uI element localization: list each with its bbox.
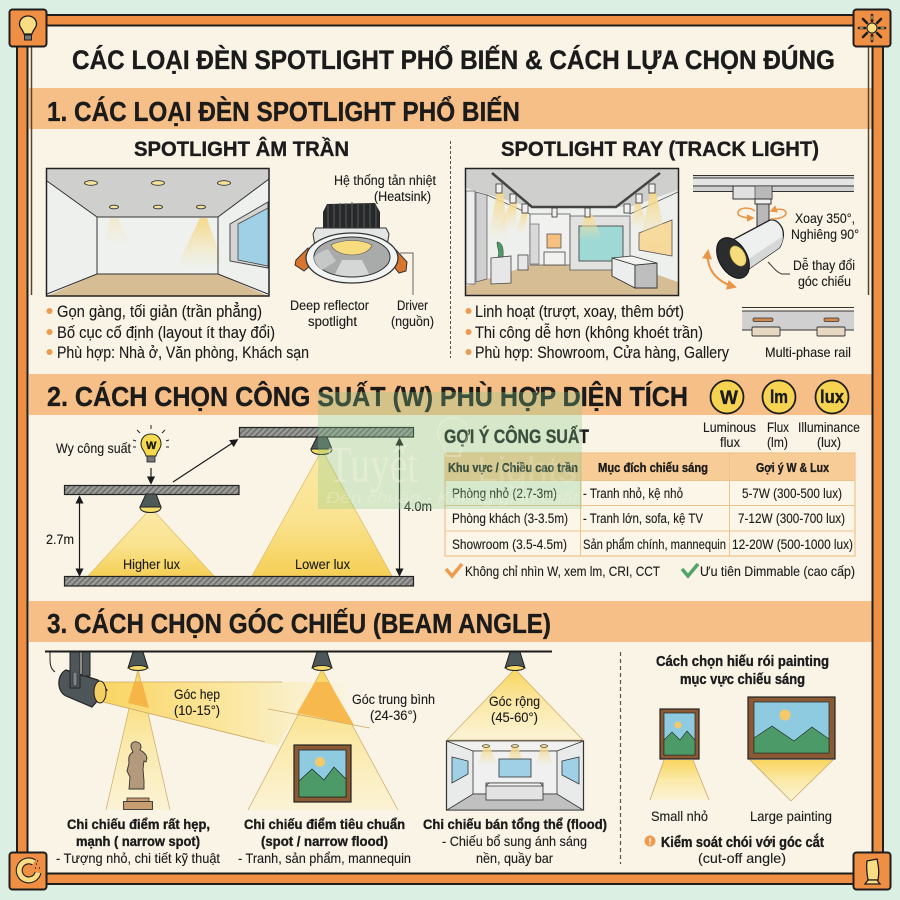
label: small painting: Small nhỏ: [651, 808, 708, 824]
label: driver: [391, 298, 434, 329]
table: power guide: Sản phẩm chính, mannequin: [583, 537, 726, 552]
table: power guide: Gợi ý W & Lux: [756, 460, 830, 475]
bullet list: recessed: Bố cục cố định (layout ít thay đổi): [57, 324, 275, 342]
bullet list: track: Thi công dễ hơn (không khoét trần): [475, 323, 703, 342]
label: medium angle: [352, 691, 435, 723]
heading: painting size: Cách chọn hiếu rói painting: [656, 654, 829, 670]
watermark: [318, 392, 582, 509]
caption: narrow spot: mạnh ( narrow spot): [76, 833, 200, 849]
icon: framed picture: [294, 745, 351, 802]
icon: pendant lamp 3: [505, 652, 525, 670]
label: rotate and tilt: [791, 210, 859, 242]
unit labels: flux: [720, 434, 740, 450]
label: lower lux: Lower lux: [295, 556, 350, 572]
unit badges: lm: [770, 387, 788, 407]
caption: narrow spot: - Tượng nhỏ, chi tiết kỹ thuật: [56, 850, 220, 866]
label: multi-phase rail: Multi-phase rail: [765, 344, 851, 360]
bullet list: track: [466, 303, 730, 362]
heading: section 2: 2. CÁCH CHỌN CÔNG SUẤT (W) PHÙ HỢP DIỆN TÍCH: [47, 380, 688, 412]
unit badges: [710, 380, 848, 414]
bullet list: track: Phù hợp: Showroom, Cửa hàng, Gallery: [475, 344, 730, 362]
icon: recessed downlight fixture: [295, 202, 407, 283]
label: narrow angle: [174, 686, 220, 718]
unit labels: Illuminance: [798, 419, 860, 435]
table: power guide: Khu vực / Chiều cao trần: [448, 460, 578, 475]
label: large painting: Large painting: [750, 808, 832, 824]
note: glare control: !: [648, 836, 652, 846]
icon: multi-phase rail: [742, 308, 854, 336]
label: deep reflector: [290, 298, 369, 329]
illustration: gallery room: [446, 741, 584, 810]
heading: painting size: [656, 654, 829, 688]
unit labels: (lux): [817, 434, 841, 450]
label: wide angle: [489, 693, 540, 725]
label: medium angle: Góc trung bình: [352, 691, 435, 707]
heading: section 3: 3. CÁCH CHỌN GÓC CHIẾU (BEAM ANGLE): [47, 608, 551, 639]
label: wattage: Wy công suất: [56, 440, 131, 456]
title: CÁC LOẠI ĐÈN SPOTLIGHT PHỔ BIẾN & CÁCH LỰA CHỌN ĐÚNG: [72, 44, 835, 75]
heading: painting size: mục vực chiếu sáng: [680, 672, 805, 688]
caption: standard spot: [238, 816, 411, 866]
label: wide angle: Góc rộng: [489, 693, 540, 709]
caption: flood: [423, 816, 607, 866]
label: rotate and tilt: Xoay 350°,: [795, 210, 855, 226]
icon: small painting with beam: [650, 709, 709, 800]
heading: power guide: GỢI Ý CÔNG SUẤT: [444, 424, 589, 448]
label: 2.7m: 2.7m: [46, 531, 74, 547]
bullet list: recessed: Phù hợp: Nhà ở, Văn phòng, Khách sạn: [57, 344, 309, 362]
bullet list: recessed: Gọn gàng, tối giản (trần phẳng): [57, 302, 262, 321]
table: power guide: 12-20W (500-1000 lux): [732, 537, 853, 552]
icon: pendant lamp 1: [128, 652, 148, 670]
unit labels: [703, 419, 860, 450]
diagram: wattage vs ceiling height: [64, 425, 414, 586]
note: not only watts: Không chỉ nhìn W, xem lm, CRI, CCT: [465, 563, 660, 579]
corner icon: light bulb: [10, 10, 46, 46]
section band 1: [29, 88, 872, 129]
section band 2: [29, 374, 872, 415]
caption: flood: nền, quầy bar: [476, 850, 553, 866]
label: driver: (nguồn): [391, 314, 434, 329]
label: heatsink: (Heatsink): [374, 189, 431, 204]
caption: narrow spot: [56, 816, 220, 866]
divider: [620, 652, 622, 864]
label: narrow angle: (10-15°): [174, 702, 220, 718]
illustration: recessed room: [46, 168, 269, 296]
note: glare control: [644, 833, 824, 866]
caption: flood: - Chiếu bổ sung ánh sáng: [442, 833, 587, 849]
table: power guide: [445, 453, 855, 556]
unit labels: Flux: [767, 419, 789, 435]
table: power guide: Mục đích chiếu sáng: [598, 460, 708, 475]
caption: narrow spot: Chi chiếu điểm rất hẹp,: [67, 816, 210, 832]
heading: section 1: 1. CÁC LOẠI ĐÈN SPOTLIGHT PHỔ BIẾN: [47, 96, 520, 127]
table: power guide: 5-7W (300-500 lux): [742, 486, 842, 501]
table: power guide: Showroom (3.5-4.5m): [452, 537, 567, 552]
icon: large painting with beam: [748, 697, 835, 801]
unit labels: Luminous: [703, 419, 756, 435]
divider: [450, 141, 452, 358]
note: dimmable: Ưu tiên Dimmable (cao cấp): [700, 563, 855, 579]
corner icon: crescent: [10, 852, 46, 890]
label: narrow angle: Góc hẹp: [174, 686, 220, 702]
watermark: Đèn chuẩn - Không gian chất: [326, 489, 579, 507]
label: adjustable angle: [793, 257, 855, 289]
corner icon: lamp holder: [854, 852, 890, 890]
unit badges: W: [720, 388, 738, 409]
icon: track spot: [50, 652, 107, 707]
note: glare control: Kiểm soát chói với góc cắt: [661, 833, 824, 851]
subheading: recessed spotlight: SPOTLIGHT ÂM TRẦN: [134, 137, 349, 161]
label: deep reflector: Deep reflector: [290, 298, 369, 313]
icon: statue: [124, 742, 152, 810]
illustration: track light room: [466, 168, 678, 296]
table: power guide: - Tranh nhỏ, kệ nhỏ: [583, 486, 683, 501]
icon: pendant lamp 2: [312, 652, 332, 670]
caption: flood: Chi chiếu bán tổng thể (flood): [423, 816, 607, 832]
corner icon: sun rays: [854, 10, 890, 46]
label: heatsink: Hệ thống tản nhiệt: [334, 173, 436, 188]
bullet list: track: Linh hoạt (trượt, xoay, thêm bớt): [475, 303, 684, 321]
table: power guide: Phòng nhỏ (2.7-3m): [452, 486, 557, 501]
section band 3: [29, 601, 872, 642]
table: power guide: Phòng khách (3-3.5m): [452, 511, 568, 526]
caption: standard spot: Chi chiếu điểm tiêu chuẩn: [244, 816, 405, 832]
unit labels: (lm): [767, 434, 788, 450]
label: deep reflector: spotlight: [308, 314, 357, 329]
subheading: track light: SPOTLIGHT RAY (TRACK LIGHT): [501, 138, 819, 161]
table: power guide: - Tranh lớn, sofa, kệ TV: [583, 511, 703, 526]
watermark: Tuyết: [328, 437, 418, 494]
leader line: driver: [400, 253, 413, 295]
label: rotate and tilt: Nghiêng 90°: [791, 226, 859, 242]
watermark: Lights: [477, 449, 577, 490]
label: medium angle: (24-36°): [370, 707, 417, 723]
diagram: beams: [45, 652, 583, 810]
caption: standard spot: - Tranh, sản phẩm, mannequin: [238, 850, 411, 866]
label: heatsink: [334, 173, 436, 204]
label: adjustable angle: góc chiếu: [798, 273, 851, 289]
caption: standard spot: (spot / narrow flood): [261, 833, 388, 849]
label: driver: Driver: [397, 298, 428, 313]
label: wide angle: (45-60°): [491, 709, 538, 725]
bullet list: recessed: [46, 302, 309, 362]
label: higher lux: Higher lux: [123, 556, 180, 572]
note: glare control: (cut-off angle): [698, 850, 786, 866]
icon: track head with rail: [693, 175, 854, 287]
table: power guide: 7-12W (300-700 lux): [738, 511, 845, 526]
label: 4.0m: 4.0m: [404, 498, 432, 514]
diagram: wattage vs ceiling height: W: [146, 440, 157, 452]
label: adjustable angle: Dễ thay đổi: [793, 257, 855, 273]
unit badges: lux: [820, 387, 844, 407]
